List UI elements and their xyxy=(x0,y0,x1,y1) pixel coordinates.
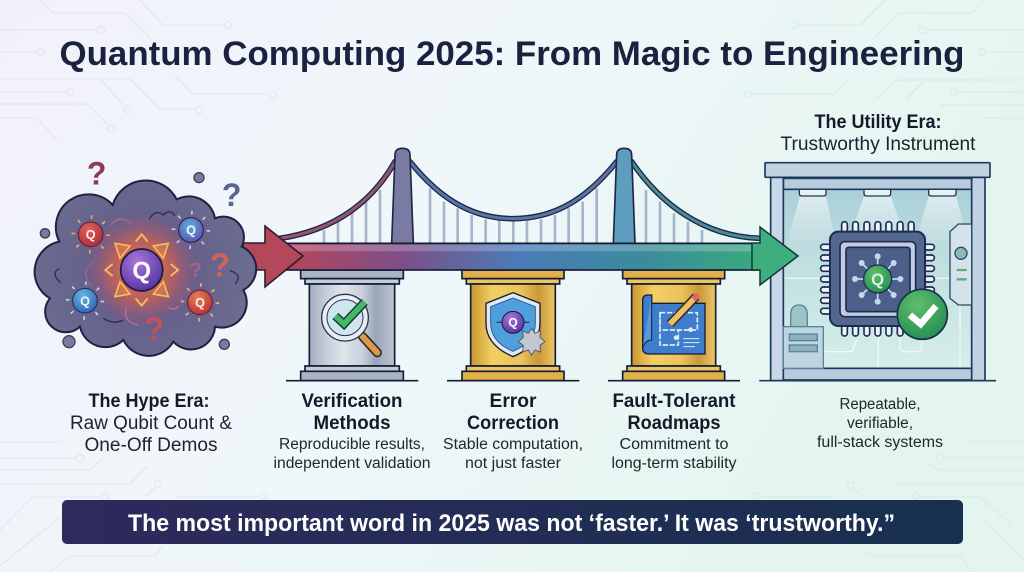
hype cloud illustration xyxy=(35,155,256,356)
question marks xyxy=(87,155,241,347)
label: utility era description xyxy=(817,396,943,451)
control panel xyxy=(950,224,972,305)
qubit: red top left xyxy=(73,217,108,252)
cloud body xyxy=(35,180,256,356)
label: utility era description: verifiable, xyxy=(847,415,913,432)
pillar: verification methods xyxy=(286,270,418,381)
callout banner xyxy=(62,500,963,544)
label: utility era heading: The Utility Era: xyxy=(814,112,942,133)
label: hype era: One-Off Demos xyxy=(84,435,218,456)
label: utility era heading: Trustworthy Instrument xyxy=(780,134,976,155)
floating dots xyxy=(40,173,229,349)
label: hype era xyxy=(70,391,232,456)
label: error correction: not just faster xyxy=(465,455,561,472)
qubit: red bottom right: Q xyxy=(195,296,205,310)
question marks: ? xyxy=(210,248,230,285)
icon: shield with Q and burst: Q xyxy=(508,316,518,330)
question marks: ? xyxy=(145,311,164,347)
transition arrow beam xyxy=(283,243,763,270)
qubit: blue bottom left xyxy=(68,283,102,318)
question marks: ? xyxy=(87,155,106,191)
circuit pattern left xyxy=(0,0,276,572)
hype arrow head xyxy=(243,226,303,287)
qubit: blue top right xyxy=(174,213,208,247)
quantum chip xyxy=(821,222,934,336)
label: verification methods: Reproducible results, xyxy=(279,436,425,453)
label: fault-tolerant roadmaps: long-term stability xyxy=(612,455,737,472)
trustworthy instrument illustration xyxy=(759,163,996,381)
equipment box xyxy=(783,305,823,368)
pillar: fault-tolerant roadmaps xyxy=(608,270,740,381)
label: fault-tolerant roadmaps: Fault-Tolerant xyxy=(612,391,736,412)
label: verification methods: Methods xyxy=(314,413,390,434)
label: fault-tolerant roadmaps: Roadmaps xyxy=(628,413,720,434)
label: error correction: Stable computation, xyxy=(443,436,583,453)
bridge: cables and towers xyxy=(280,148,760,243)
icon: magnifier with check xyxy=(322,294,377,353)
label: fault-tolerant roadmaps xyxy=(612,391,737,472)
label: verification methods xyxy=(274,391,430,472)
icon: blueprint with pencil xyxy=(643,295,705,354)
label: verification methods: independent validation xyxy=(274,455,430,472)
green arrow head xyxy=(752,227,798,285)
verified check badge xyxy=(897,289,947,339)
label: utility era description: Repeatable, xyxy=(840,396,920,413)
central qubit: Q xyxy=(132,258,151,285)
pillar: error correction xyxy=(447,270,579,381)
qubit: red top left: Q xyxy=(86,228,96,242)
label: utility era description: full-stack systems xyxy=(817,434,943,451)
label: hype era: The Hype Era: xyxy=(88,391,210,412)
chamber frame xyxy=(759,163,996,381)
label: verification methods: Verification xyxy=(302,391,402,412)
label: error correction: Correction xyxy=(467,413,559,434)
circuit pattern right xyxy=(744,0,1024,572)
cloud wisps xyxy=(55,212,238,325)
qubit: red bottom right xyxy=(183,285,217,320)
qubit: blue bottom left: Q xyxy=(80,294,90,308)
question marks: ? xyxy=(222,177,241,213)
callout banner: The most important word in 2025 was not ‘faster.’ It was ‘trustworthy.” xyxy=(128,510,895,537)
label: error correction: Error xyxy=(490,391,537,412)
label: error correction xyxy=(443,391,583,472)
question marks: ? xyxy=(189,259,202,282)
label: hype era: Raw Qubit Count & xyxy=(70,413,232,434)
qubit: blue top right: Q xyxy=(186,224,196,238)
label: utility era heading xyxy=(780,112,976,155)
label: fault-tolerant roadmaps: Commitment to xyxy=(620,436,728,453)
title: Quantum Computing 2025: From Magic to Engineering xyxy=(60,35,965,73)
central qubit xyxy=(85,213,198,327)
quantum chip: Q xyxy=(871,270,884,289)
